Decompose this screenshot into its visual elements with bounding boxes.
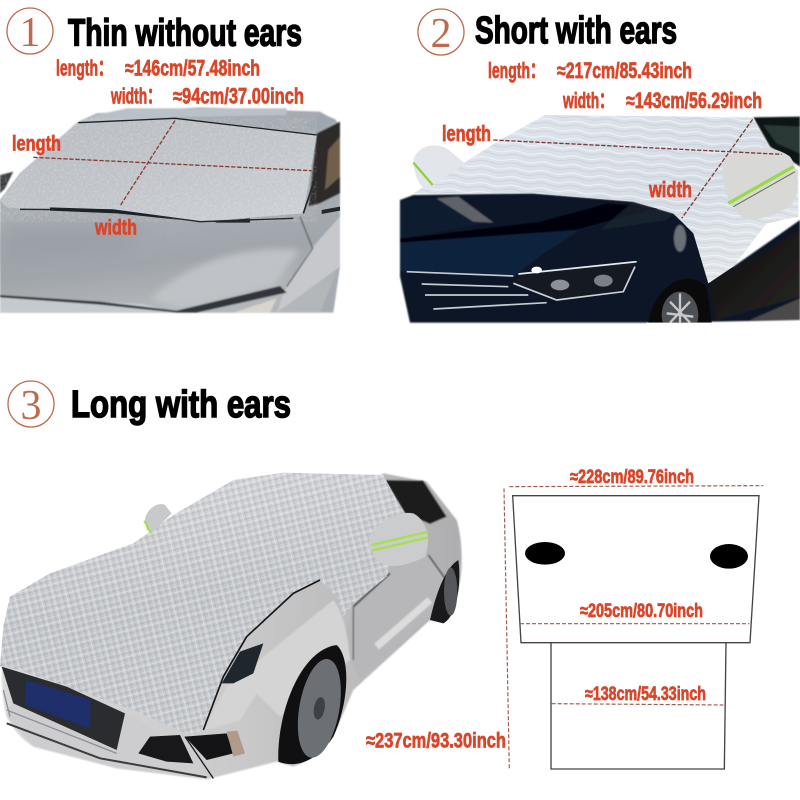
label: top width: ≈228cm/89.76inch bbox=[570, 467, 694, 488]
measurement dashes bbox=[504, 486, 763, 770]
label: middle width: ≈205cm/80.70inch bbox=[580, 601, 703, 622]
rear wheel bbox=[430, 560, 459, 623]
size labels: option 1: length： bbox=[56, 56, 112, 80]
measurement dashes bbox=[33, 121, 312, 206]
cover bbox=[0, 473, 405, 735]
mirror ear: right bbox=[368, 513, 428, 566]
dark car body bbox=[400, 117, 800, 323]
mirror ear: left bbox=[413, 145, 465, 190]
size labels: option 2: width： bbox=[562, 88, 613, 113]
car body and hood bbox=[0, 107, 340, 313]
grille bbox=[407, 272, 547, 309]
front bumper intake bbox=[7, 723, 245, 778]
icon: circled number 1 bbox=[7, 8, 53, 56]
cover bbox=[413, 115, 798, 283]
headlight bbox=[222, 643, 263, 683]
icon: circled number 2 bbox=[418, 9, 464, 57]
size labels: option 1 bbox=[56, 56, 304, 108]
size labels: option 2 bbox=[488, 58, 762, 113]
grille and number plate bbox=[2, 667, 125, 753]
photo: long cover on silver car bbox=[0, 473, 462, 779]
size labels: option 1: ≈146cm/57.48inch bbox=[125, 56, 260, 80]
photo: windshield cover on silver car bbox=[0, 107, 340, 313]
front wheel bbox=[647, 279, 727, 349]
mirror hole: left bbox=[525, 542, 565, 565]
headlight bbox=[512, 261, 637, 302]
label: width on photo 1: width bbox=[94, 216, 137, 240]
mirror ear: left bbox=[144, 504, 172, 533]
icon: circled number 1: 1 bbox=[20, 10, 40, 56]
label: length on photo 1: length bbox=[12, 132, 61, 156]
lower panel outline bbox=[551, 643, 726, 769]
photo: short cover with mirror ears on dark car bbox=[400, 115, 800, 349]
diagram: flat cover with dimensions bbox=[504, 486, 763, 770]
front wheel bbox=[278, 645, 348, 764]
icon: circled number 2: 2 bbox=[430, 11, 452, 57]
upper panel outline bbox=[513, 496, 759, 643]
heading: option 2 bbox=[418, 9, 677, 57]
heading: option 1 bbox=[7, 8, 302, 56]
windshield cover bbox=[0, 118, 317, 222]
icon: circled number 3: 3 bbox=[20, 383, 42, 429]
size labels: option 1: ≈94cm/37.00inch bbox=[173, 84, 304, 108]
title: thin without ears: Thin without ears bbox=[68, 12, 302, 54]
label: lower width: ≈138cm/54.33inch bbox=[585, 684, 706, 705]
icon: circled number 3 bbox=[8, 381, 54, 429]
car body bbox=[2, 473, 462, 779]
mirror hole: right bbox=[710, 544, 748, 569]
wipers bbox=[50, 207, 340, 223]
label: width on photo 2: width bbox=[648, 177, 692, 202]
measurement dashes bbox=[493, 119, 782, 218]
mirror ear: right bbox=[723, 147, 797, 219]
heading: option 3 bbox=[8, 381, 291, 429]
label: total length: ≈237cm/93.30inch bbox=[366, 730, 506, 752]
size labels: option 2: length： bbox=[488, 58, 544, 83]
label: length on photo 2: length bbox=[442, 121, 491, 146]
title: short with ears: Short with ears bbox=[475, 10, 677, 52]
title: long with ears: Long with ears bbox=[71, 384, 291, 426]
size labels: option 1: width： bbox=[110, 84, 161, 108]
size labels: option 2: ≈217cm/85.43inch bbox=[557, 58, 692, 83]
